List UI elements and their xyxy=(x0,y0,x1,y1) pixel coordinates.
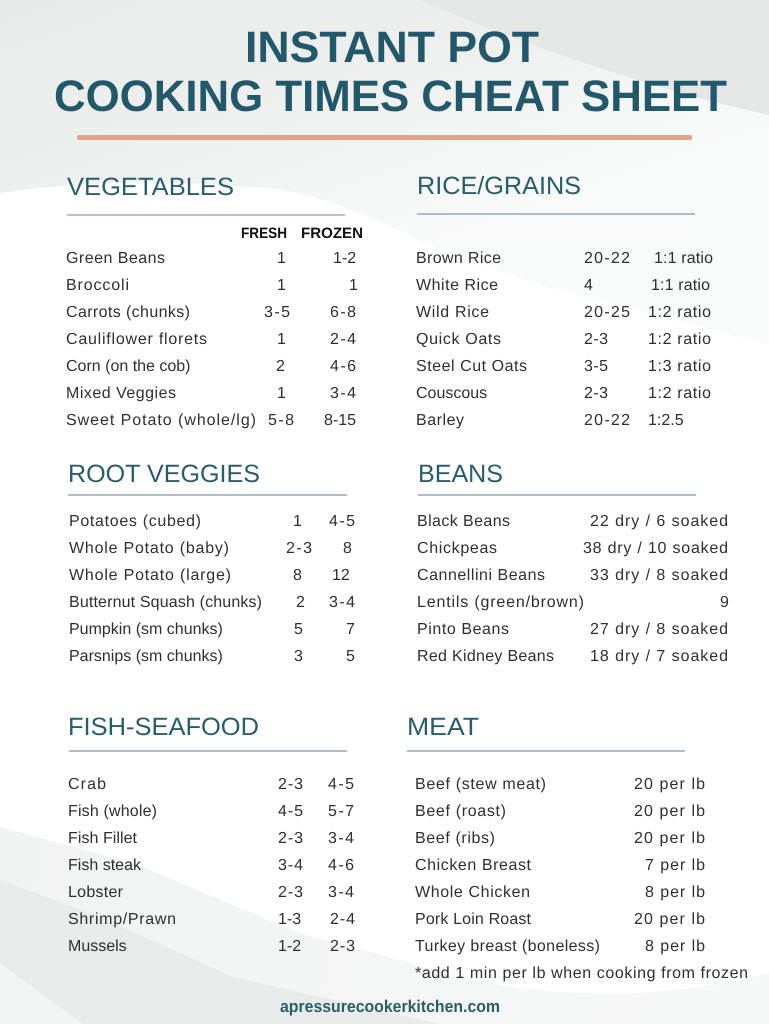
heading: root veggies: ROOT VEGGIES xyxy=(68,460,260,488)
row: broccoli xyxy=(66,277,358,294)
row: crab: 4-5 xyxy=(328,776,354,793)
row: large potato: Whole Potato (large) xyxy=(69,567,231,584)
row: pork loin xyxy=(415,911,705,928)
row: brown rice: 1:1 ratio xyxy=(654,250,713,267)
row: pinto beans: 27 dry / 8 soaked xyxy=(590,621,728,638)
row: couscous xyxy=(416,385,711,402)
row: red kidney beans: 18 dry / 7 soaked xyxy=(590,648,728,665)
heading: beans: BEANS xyxy=(418,460,503,488)
row: corn: Corn (on the cob) xyxy=(66,358,191,375)
row: fish fillet: 2-3 xyxy=(278,830,303,847)
row: baby potato: Whole Potato (baby) xyxy=(69,540,229,557)
row: large potato: 12 xyxy=(332,567,350,584)
row: brown rice xyxy=(416,250,713,267)
row: fish fillet: Fish Fillet xyxy=(68,830,138,847)
column headers: FRESH xyxy=(241,225,287,242)
panel: meat xyxy=(407,713,748,982)
row: large potato xyxy=(69,567,350,584)
row: turkey breast xyxy=(415,938,705,955)
row: beef roast: 20 per lb xyxy=(634,803,705,820)
row: fish fillet xyxy=(68,830,354,847)
row: green beans: Green Beans xyxy=(66,250,165,267)
row: couscous: 1:2 ratio xyxy=(648,385,711,402)
row: butternut squash xyxy=(69,594,355,611)
row: pork loin: 20 per lb xyxy=(634,911,705,928)
row: parsnips: 5 xyxy=(346,648,355,665)
row: fish whole: Fish (whole) xyxy=(68,803,157,820)
row: mixed veggies: Mixed Veggies xyxy=(66,385,176,402)
row: butternut squash: 2 xyxy=(296,594,305,611)
row: barley: 1:2.5 xyxy=(648,412,684,429)
row: quick oats: 1:2 ratio xyxy=(648,331,711,348)
row: butternut squash: 3-4 xyxy=(329,594,355,611)
row: sweet potato: 5-8 xyxy=(268,412,294,429)
row: shrimp xyxy=(68,911,355,928)
row: fish whole xyxy=(68,803,354,820)
row: fish fillet: 3-4 xyxy=(328,830,354,847)
row: green beans xyxy=(66,250,356,267)
row: beef roast: Beef (roast) xyxy=(415,803,506,820)
row: fish steak: Fish steak xyxy=(68,857,142,874)
row: lobster: 3-4 xyxy=(328,884,354,901)
heading: rice/grains: RICE/GRAINS xyxy=(417,172,581,200)
row: beef stew xyxy=(415,776,705,793)
row: whole chicken: 8 per lb xyxy=(645,884,705,901)
row: quick oats: Quick Oats xyxy=(416,331,501,348)
row: barley: Barley xyxy=(416,412,464,429)
row: chickpeas: Chickpeas xyxy=(417,540,497,557)
row: sweet potato: 8-15 xyxy=(324,412,356,429)
row: corn: 4-6 xyxy=(330,358,356,375)
row: chicken breast: 7 per lb xyxy=(645,857,705,874)
row: broccoli: 1 xyxy=(349,277,358,294)
row: sweet potato: Sweet Potato (whole/lg) xyxy=(66,412,256,429)
panel: beans xyxy=(417,460,729,665)
row: couscous: 2-3 xyxy=(584,385,608,402)
row: green beans: 1-2 xyxy=(333,250,356,267)
row: black beans: 22 dry / 6 soaked xyxy=(590,513,728,530)
title: COOKING TIMES CHEAT SHEET xyxy=(54,72,727,121)
panel: vegetables xyxy=(66,173,363,429)
heading: vegetables: VEGETABLES xyxy=(67,173,234,201)
row: brown rice: 20-22 xyxy=(584,250,630,267)
row: parsnips: Parsnips (sm chunks) xyxy=(69,648,223,665)
row: black beans xyxy=(417,513,728,530)
row: wild rice: 1:2 ratio xyxy=(648,304,711,321)
row: potatoes xyxy=(69,513,355,530)
row: cannellini beans xyxy=(417,567,728,584)
row: beef ribs: 20 per lb xyxy=(634,830,705,847)
row: lobster xyxy=(68,884,354,901)
row: quick oats xyxy=(416,331,711,348)
row: turkey breast: 8 per lb xyxy=(645,938,705,955)
row: baby potato: 2-3 xyxy=(286,540,312,557)
row: lentils xyxy=(417,594,729,611)
row: lentils: Lentils (green/brown) xyxy=(417,594,584,611)
row: mixed veggies xyxy=(66,385,356,402)
footnote: *add 1 min per lb when cooking from frozen xyxy=(415,965,748,982)
row: carrots: 3-5 xyxy=(264,304,290,321)
row: butternut squash: Butternut Squash (chunks) xyxy=(69,594,262,611)
row: cannellini beans: Cannellini Beans xyxy=(417,567,545,584)
row: potatoes: Potatoes (cubed) xyxy=(69,513,201,530)
row: white rice: 1:1 ratio xyxy=(651,277,710,294)
row: green beans: 1 xyxy=(277,250,286,267)
row: beef stew: Beef (stew meat) xyxy=(415,776,546,793)
row: broccoli: 1 xyxy=(277,277,286,294)
row: cauliflower xyxy=(66,331,356,348)
row: mussels: Mussels xyxy=(68,938,127,955)
title: INSTANT POT xyxy=(245,23,539,72)
row: white rice: White Rice xyxy=(416,277,498,294)
row: black beans: Black Beans xyxy=(417,513,510,530)
row: chicken breast: Chicken Breast xyxy=(415,857,532,874)
row: beef ribs: Beef (ribs) xyxy=(415,830,495,847)
row: beef roast xyxy=(415,803,705,820)
row: crab xyxy=(68,776,354,793)
row: cauliflower: 2-4 xyxy=(330,331,356,348)
row: fish whole: 4-5 xyxy=(278,803,303,820)
row: carrots: Carrots (chunks) xyxy=(66,304,190,321)
row: red kidney beans: Red Kidney Beans xyxy=(417,648,554,665)
panel: rice/grains xyxy=(416,172,713,429)
row: chickpeas: 38 dry / 10 soaked xyxy=(583,540,728,557)
row: couscous: Couscous xyxy=(416,385,487,402)
row: brown rice: Brown Rice xyxy=(416,250,501,267)
row: lobster: 2-3 xyxy=(278,884,303,901)
title xyxy=(54,23,727,121)
row: shrimp: Shrimp/Prawn xyxy=(68,911,176,928)
row: wild rice: Wild Rice xyxy=(416,304,489,321)
row: pork loin: Pork Loin Roast xyxy=(415,911,532,928)
row: steel cut oats: Steel Cut Oats xyxy=(416,358,527,375)
row: steel cut oats: 1:3 ratio xyxy=(648,358,711,375)
row: crab: Crab xyxy=(68,776,106,793)
row: pinto beans xyxy=(417,621,728,638)
row: fish whole: 5-7 xyxy=(328,803,354,820)
row: shrimp: 1-3 xyxy=(278,911,301,928)
row: whole chicken: Whole Chicken xyxy=(415,884,530,901)
column headers: FROZEN xyxy=(301,225,363,242)
row: steel cut oats: 3-5 xyxy=(584,358,608,375)
row: fish steak xyxy=(68,857,354,874)
row: wild rice: 20-25 xyxy=(584,304,630,321)
row: cauliflower: Cauliflower florets xyxy=(66,331,207,348)
title underline xyxy=(77,135,692,140)
row: sweet potato xyxy=(66,412,356,429)
row: beef ribs xyxy=(415,830,705,847)
row: pumpkin: 7 xyxy=(346,621,355,638)
column headers xyxy=(241,225,363,242)
row: shrimp: 2-4 xyxy=(330,911,355,928)
row: fish steak: 3-4 xyxy=(278,857,303,874)
row: white rice xyxy=(416,277,710,294)
row: steel cut oats xyxy=(416,358,711,375)
row: pumpkin: Pumpkin (sm chunks) xyxy=(69,621,223,638)
footer url: apressurecookerkitchen.com xyxy=(280,997,500,1016)
row: mixed veggies: 1 xyxy=(277,385,286,402)
row: wild rice xyxy=(416,304,711,321)
row: beef stew: 20 per lb xyxy=(634,776,705,793)
row: crab: 2-3 xyxy=(278,776,303,793)
panel: fish-seafood xyxy=(68,713,355,955)
row: mussels: 2-3 xyxy=(330,938,355,955)
row: turkey breast: Turkey breast (boneless) xyxy=(415,938,600,955)
row: large potato: 8 xyxy=(293,567,302,584)
row: quick oats: 2-3 xyxy=(584,331,608,348)
row: whole chicken xyxy=(415,884,705,901)
heading: fish-seafood: FISH-SEAFOOD xyxy=(68,713,259,741)
row: cannellini beans: 33 dry / 8 soaked xyxy=(590,567,728,584)
row: baby potato: 8 xyxy=(343,540,352,557)
row: parsnips xyxy=(69,648,355,665)
row: pumpkin xyxy=(69,621,355,638)
row: carrots: 6-8 xyxy=(330,304,356,321)
row: carrots xyxy=(66,304,356,321)
row: white rice: 4 xyxy=(584,277,593,294)
row: fish steak: 4-6 xyxy=(328,857,354,874)
row: pumpkin: 5 xyxy=(294,621,303,638)
row: chickpeas xyxy=(417,540,728,557)
row: lobster: Lobster xyxy=(68,884,124,901)
heading: meat: MEAT xyxy=(407,713,479,741)
row: red kidney beans xyxy=(417,648,728,665)
panel: root veggies xyxy=(68,460,355,665)
row: baby potato xyxy=(69,540,352,557)
row: potatoes: 4-5 xyxy=(329,513,355,530)
row: chicken breast xyxy=(415,857,705,874)
row: mussels: 1-2 xyxy=(278,938,301,955)
row: barley: 20-22 xyxy=(584,412,630,429)
row: corn: 2 xyxy=(276,358,285,375)
row: lentils: 9 xyxy=(720,594,729,611)
row: potatoes: 1 xyxy=(293,513,302,530)
row: parsnips: 3 xyxy=(294,648,303,665)
row: broccoli: Broccoli xyxy=(66,277,129,294)
row: pinto beans: Pinto Beans xyxy=(417,621,509,638)
row: mixed veggies: 3-4 xyxy=(330,385,356,402)
row: cauliflower: 1 xyxy=(277,331,286,348)
row: barley xyxy=(416,412,684,429)
row: corn xyxy=(66,358,356,375)
row: mussels xyxy=(68,938,355,955)
